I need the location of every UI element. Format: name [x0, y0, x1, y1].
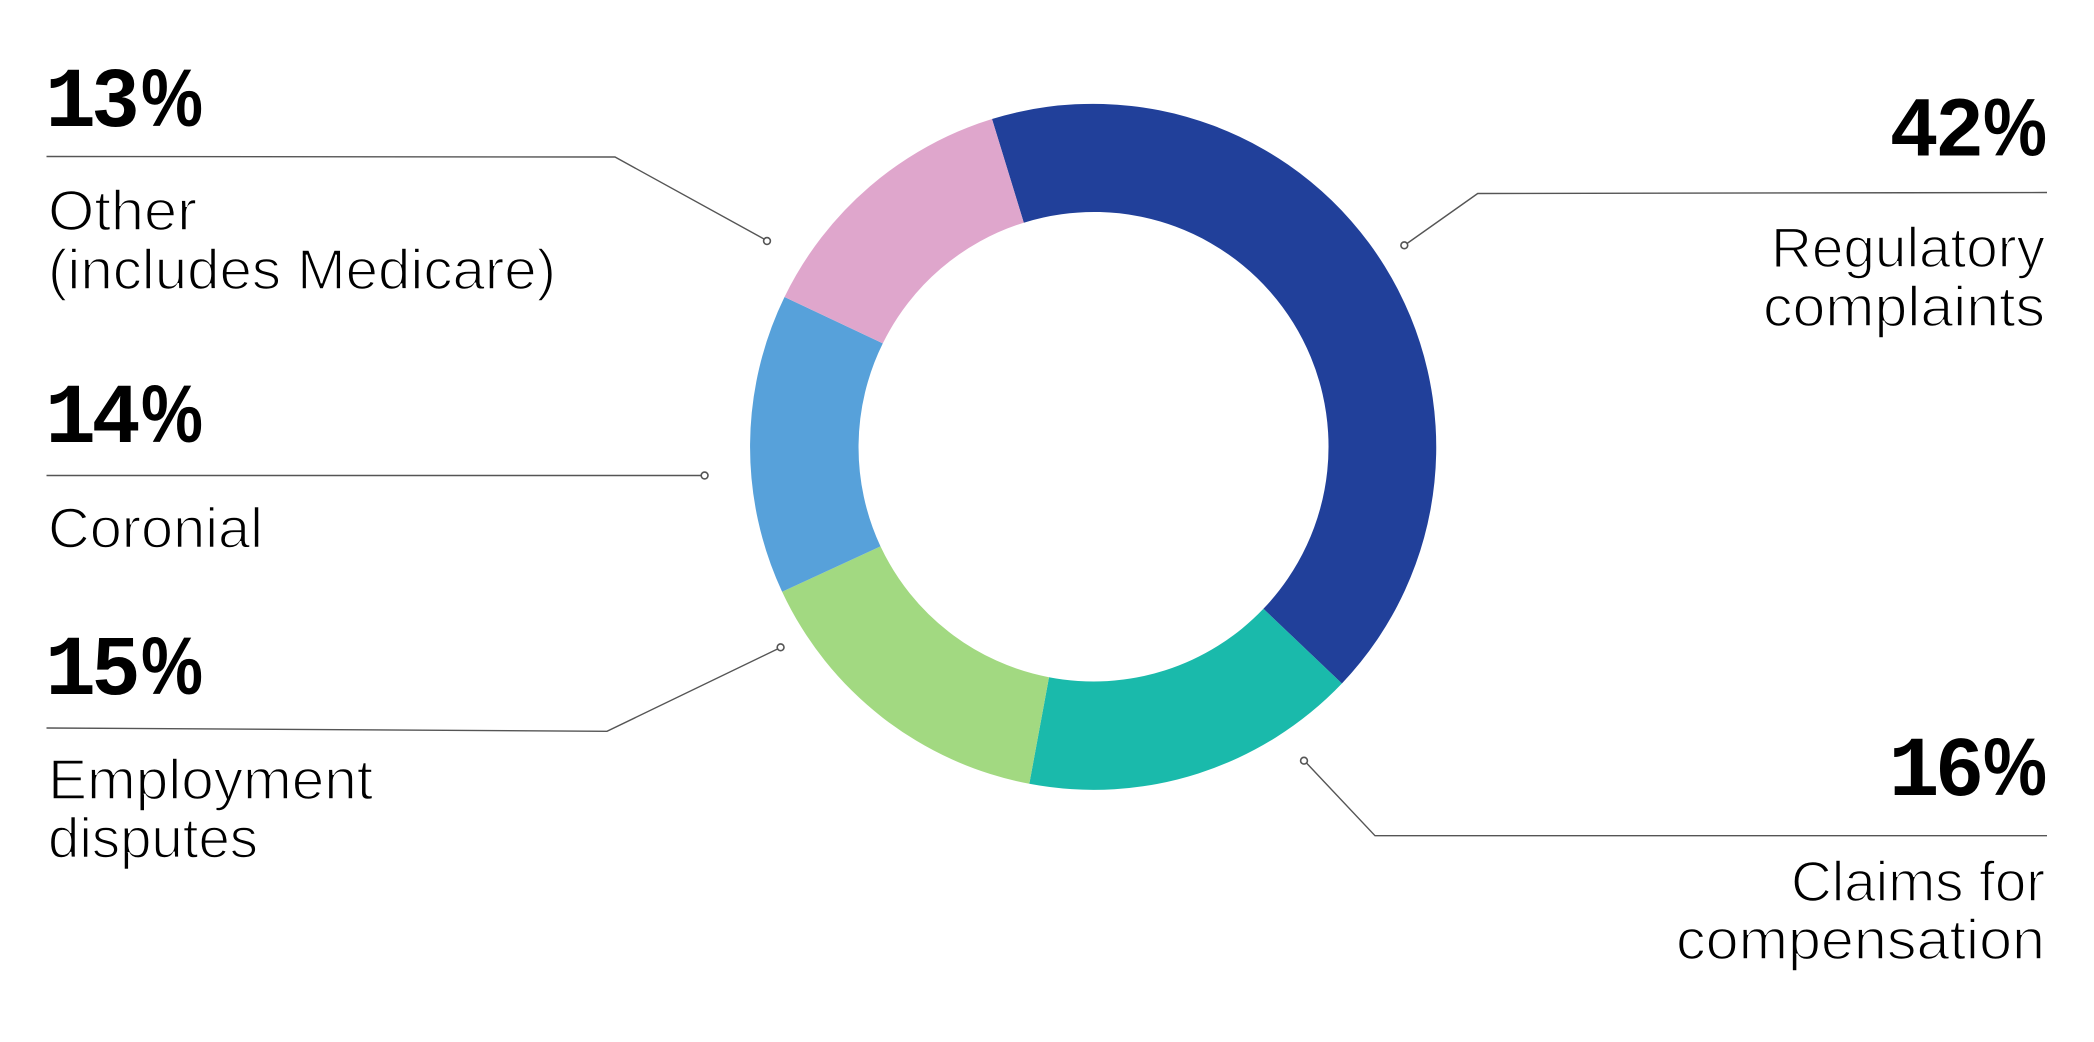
callout: coronial 14%	[45, 369, 708, 560]
leader line	[46, 474, 701, 476]
leader dot	[764, 238, 770, 244]
leader dot	[777, 644, 784, 651]
percentage: 5	[93, 621, 139, 712]
percentage: %	[1983, 82, 2047, 174]
segment: employment disputes 15%	[782, 546, 1049, 784]
callout: regulatory complaints 42%	[1401, 82, 2047, 339]
percentage: 4	[93, 369, 139, 460]
segment: coronial 14%	[750, 297, 883, 592]
callout: employment disputes 15%	[45, 621, 784, 870]
label: Coronial	[48, 496, 263, 560]
percentage: 4	[1891, 82, 1937, 174]
leader line	[1306, 763, 2047, 836]
label: (includes Medicare)	[48, 238, 556, 302]
label	[48, 748, 373, 870]
percentage: %	[141, 369, 203, 460]
percentage: 3	[93, 53, 139, 144]
leader dot	[701, 472, 708, 479]
label: compensation	[1676, 908, 2045, 972]
label	[48, 179, 556, 302]
percentage: 6	[1937, 722, 1983, 813]
percentage: %	[141, 621, 203, 712]
label: complaints	[1763, 275, 2045, 339]
segment: regulatory complaints 42%	[992, 104, 1436, 683]
label: Claims for	[1791, 850, 2045, 914]
label: Regulatory	[1771, 216, 2045, 280]
label	[1676, 850, 2045, 972]
percentage: %	[141, 53, 203, 144]
percentage: 2	[1937, 82, 1983, 174]
callout: claims for compensation 16%	[1301, 722, 2047, 972]
leader line	[46, 156, 764, 239]
leader line	[1407, 192, 2047, 244]
percentage: 1	[45, 55, 96, 152]
percentage: 1	[1888, 724, 1940, 821]
label: disputes	[48, 806, 258, 870]
segment: claims for compensation 16%	[1029, 609, 1342, 790]
segment: other 13%	[784, 119, 1024, 343]
percentage: %	[1983, 722, 2047, 813]
leader dot	[1301, 757, 1307, 764]
leader dot	[1401, 242, 1408, 249]
donut chart	[750, 104, 1436, 790]
percentage: 1	[45, 371, 96, 468]
label: Employment	[48, 748, 373, 812]
percentage: 1	[45, 623, 96, 720]
callout: other 13%	[45, 53, 770, 302]
label: Other	[48, 179, 197, 243]
leader line	[46, 649, 778, 731]
label	[1763, 216, 2045, 339]
